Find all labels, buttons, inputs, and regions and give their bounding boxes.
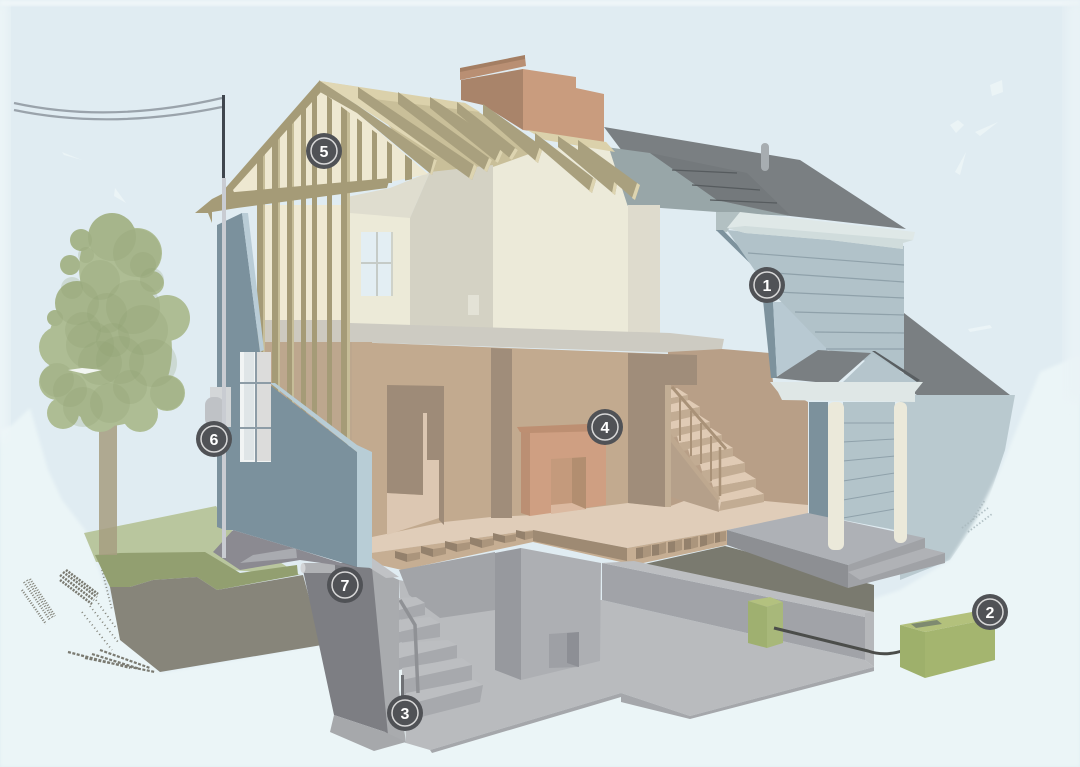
porch roof — [770, 350, 923, 402]
utility pole — [222, 95, 226, 558]
timber framing backing — [262, 205, 352, 442]
roof deck behind rafters — [358, 90, 545, 172]
staircase — [643, 387, 764, 512]
tree — [39, 213, 190, 555]
basement handrail — [400, 600, 418, 693]
fireplace — [517, 424, 606, 516]
doorway — [387, 385, 444, 535]
tree canopy — [39, 213, 190, 432]
outdoor unit — [900, 612, 995, 678]
ground: grass and soil — [84, 506, 322, 672]
tree trunk — [99, 420, 117, 555]
connecting duct — [774, 628, 905, 654]
lower right roof — [904, 313, 1010, 395]
badge 5: 5 — [320, 144, 329, 161]
porch wall — [809, 402, 895, 530]
left gable rafter — [222, 80, 321, 208]
wall studs — [257, 85, 412, 445]
electric meter — [205, 387, 231, 427]
interior wall beside stairs — [628, 353, 697, 507]
floor joists — [371, 530, 727, 570]
main floor deck — [372, 495, 808, 553]
porch columns — [828, 402, 907, 550]
badge 4: 4 — [601, 420, 610, 437]
badge 3: 3 — [401, 706, 410, 723]
second-storey floor band — [350, 323, 724, 354]
upstairs window — [361, 232, 393, 296]
roof vent — [761, 143, 769, 171]
foundation footing — [330, 715, 406, 751]
upper siding wall — [716, 212, 915, 378]
utility wires — [14, 98, 222, 119]
badge 1: 1 — [763, 278, 772, 295]
first floor back walls — [350, 342, 808, 540]
cornice — [727, 212, 915, 249]
ceiling joist chord — [195, 178, 390, 223]
basement chimney base — [495, 548, 601, 680]
roof rafters — [320, 81, 640, 200]
badge 6 — [196, 421, 232, 457]
badge 3 — [387, 695, 423, 731]
basement back wall — [399, 552, 495, 618]
badge 1 — [749, 267, 785, 303]
crawl space soil — [640, 546, 874, 614]
badge 7 — [327, 567, 363, 603]
foundation wall, right — [602, 561, 874, 667]
pole over wall — [222, 178, 226, 558]
badge 2 — [972, 594, 1008, 630]
basement floor edge — [430, 667, 874, 753]
upper floor walls — [346, 142, 660, 334]
paint speckles in the snow — [22, 500, 992, 672]
basement floor — [399, 580, 874, 750]
pipe — [300, 563, 335, 573]
exterior foundation footing — [213, 530, 357, 570]
roof sheathing — [320, 81, 615, 152]
badge 4 — [587, 409, 623, 445]
light switch — [468, 295, 479, 315]
exterior left wall — [217, 213, 372, 568]
badge 6: 6 — [210, 432, 219, 449]
main roof — [604, 127, 906, 229]
porch slab and steps — [727, 513, 945, 588]
badge 7: 7 — [341, 578, 350, 595]
chimney — [460, 55, 604, 142]
stair railing — [672, 387, 726, 496]
badge 2: 2 — [986, 605, 995, 622]
interior column — [491, 348, 512, 518]
thick foundation wall, left — [303, 558, 406, 751]
side window — [240, 352, 271, 462]
dehumidifier unit, indoor — [748, 597, 783, 648]
basement stairs — [399, 597, 483, 722]
badge 5 — [306, 133, 342, 169]
gable infill — [232, 86, 428, 205]
right wing wall — [900, 395, 1015, 580]
